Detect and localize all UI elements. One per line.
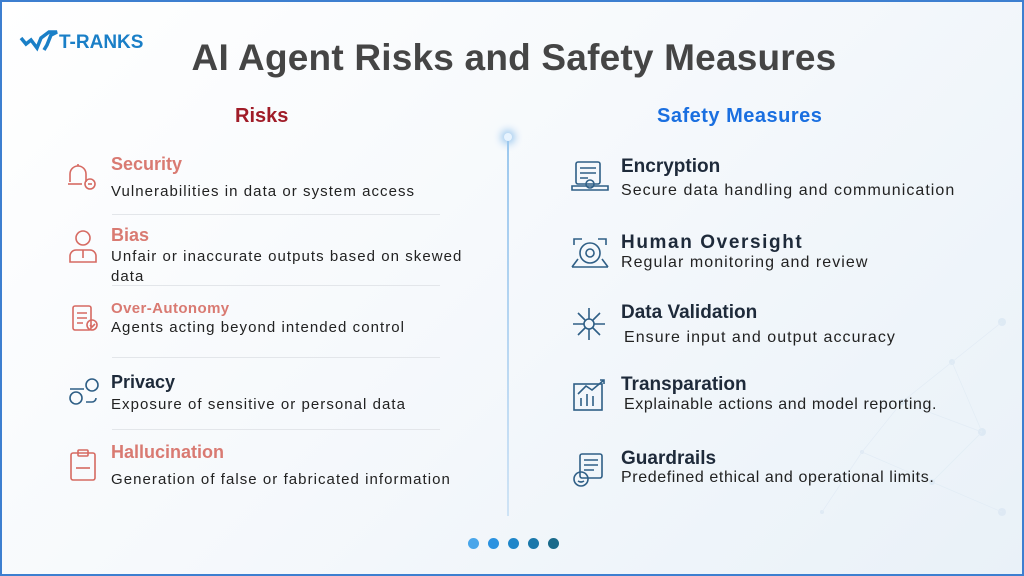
icon: hallucination [70,449,96,481]
icon: data validation [573,308,605,340]
icon: over-autonomy [72,305,98,331]
risk: Hallucination: Generation of false or fabricated information [111,471,451,488]
decorative network background [820,318,1006,516]
pagination dots [468,538,559,549]
risk: Hallucination: Hallucination [111,442,224,462]
risk: Over-Autonomy: Agents acting beyond intended control [111,319,405,336]
safety: Data Validation: Data Validation [621,302,757,323]
safety: Human Oversight: Human Oversight [621,232,803,253]
icon: human oversight [571,238,608,268]
risk: Privacy: Privacy [111,372,175,392]
safety: Guardrails [573,448,934,487]
safety: Guardrails: Guardrails [621,448,716,469]
risk: Bias: Unfair or inaccurate outputs based on skewed [111,248,462,265]
safety: Encryption [571,156,955,199]
panel: safety measures [571,156,955,487]
risk: Security [68,154,415,200]
icon: guardrails [573,453,603,487]
title: AI Agent Risks and Safety Measures [192,37,836,78]
risk: Bias [69,225,462,285]
safety: Encryption: Secure data handling and communication [621,182,955,199]
risk: Security: Security [111,154,182,174]
safety: Data Validation [573,302,896,346]
risk: Privacy: Exposure of sensitive or personal data [111,396,406,413]
icon: encryption [571,161,609,191]
icon: transparation [573,379,605,411]
safety: Human Oversight: Regular monitoring and review [621,254,868,271]
icon: bias [69,230,97,263]
center divider line [496,126,520,516]
logo: T-RANKS [20,30,143,53]
safety: Transparation: Transparation [621,374,747,395]
logo: T-RANKS: T-RANKS [59,32,143,53]
icon: security [68,164,96,190]
risk: Bias: data [111,268,144,285]
icon: privacy [69,378,99,405]
safety: Data Validation: Ensure input and output accuracy [624,329,896,346]
safety: Encryption: Encryption [621,156,720,177]
heading: Risks: Risks [235,105,288,127]
safety: Guardrails: Predefined ethical and operational limits. [621,469,934,486]
risk: Over-Autonomy: Over-Autonomy [111,300,230,317]
heading: Safety Measures: Safety Measures [657,105,822,127]
risk: Bias: Bias [111,225,149,245]
safety: Human Oversight [571,232,868,271]
risk: Hallucination [70,442,451,488]
risk: Privacy [69,372,406,413]
risk: Security: Vulnerabilities in data or system access [111,183,415,200]
safety: Transparation [573,374,937,413]
risk: Over-Autonomy [72,300,405,336]
safety: Transparation: Explainable actions and model reporting. [624,396,937,413]
